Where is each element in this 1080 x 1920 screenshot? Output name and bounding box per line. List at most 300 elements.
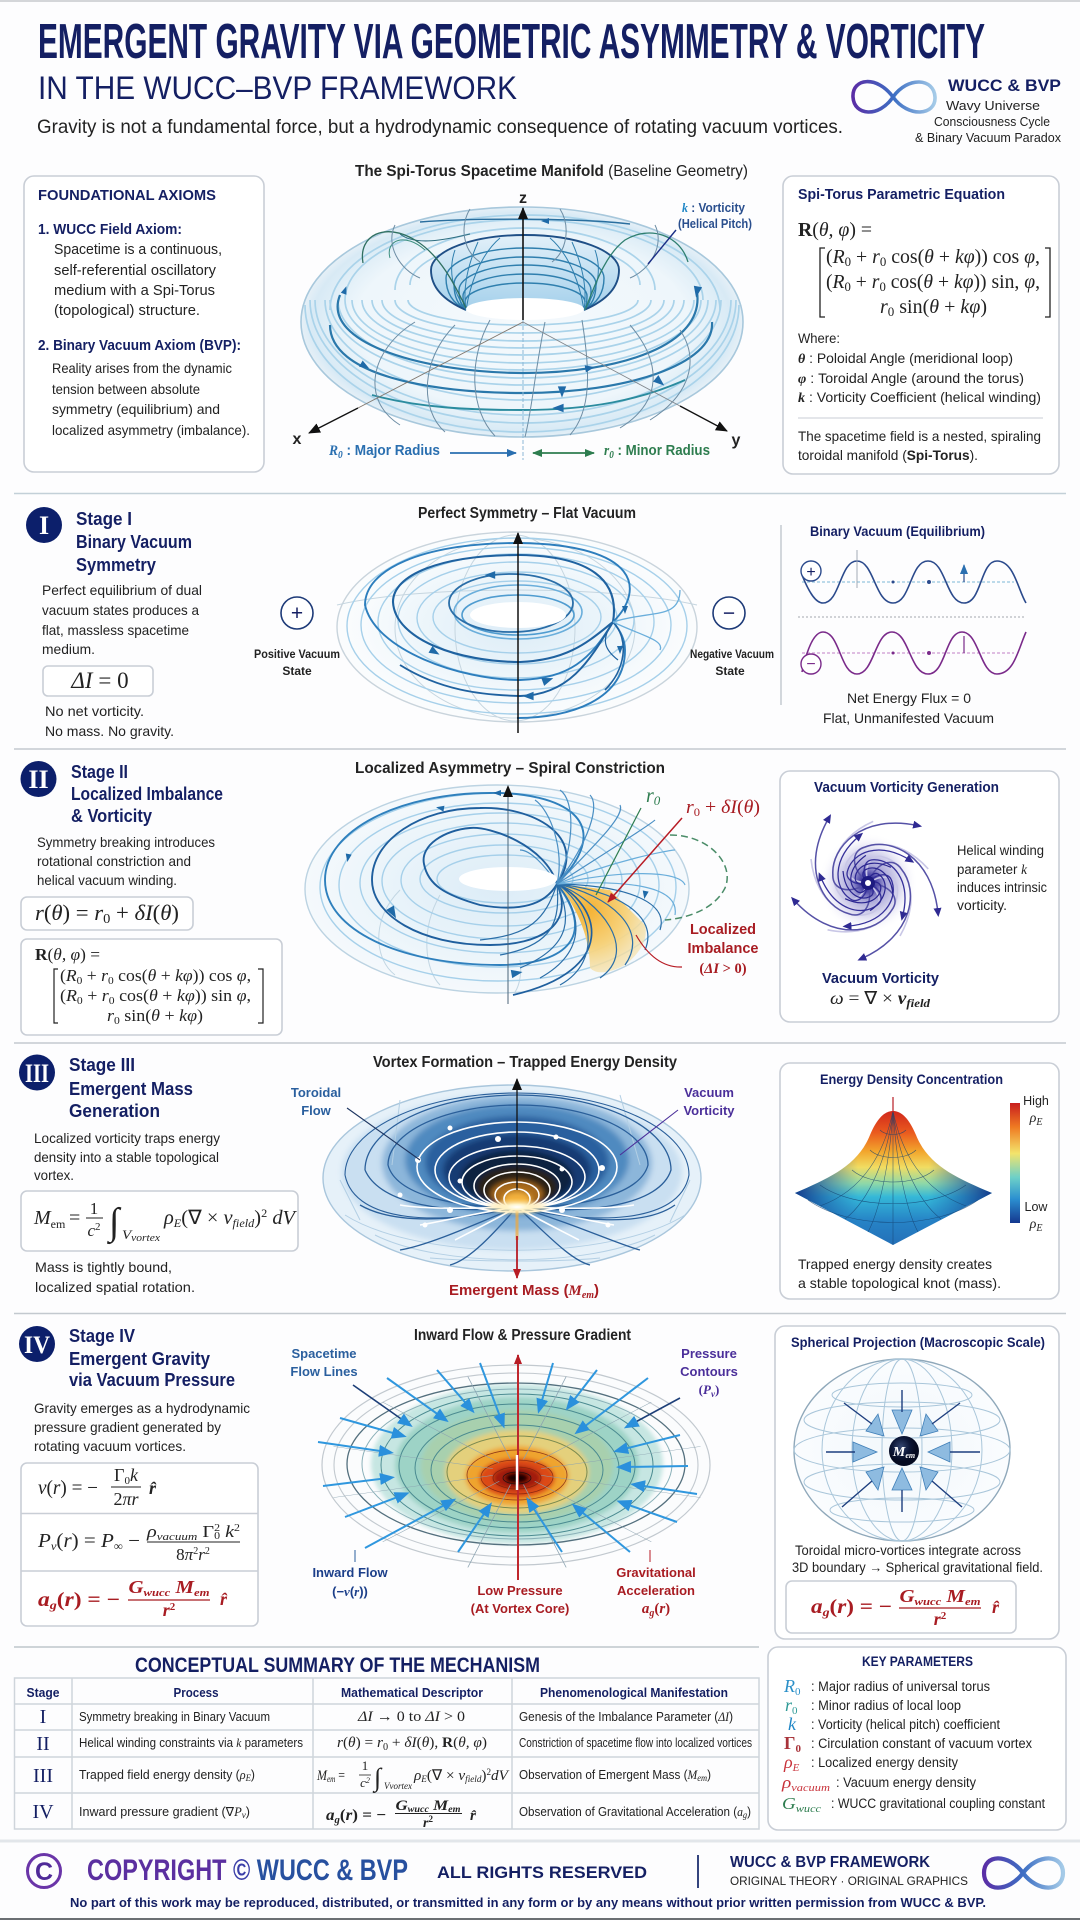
rights reserved: ALL RIGHTS RESERVED [437, 1863, 647, 1882]
minor radius label: 0 [609, 450, 614, 461]
equation box: emergent mass: ρ [163, 1207, 174, 1229]
pressure formula: ∞ [114, 1539, 123, 1553]
stage I heading: Symmetry [76, 555, 156, 575]
equation box: emergent mass: (∇ × [181, 1207, 223, 1229]
equation: cos( [886, 246, 925, 268]
table row IV: M [429, 1798, 449, 1814]
equation box: delta I [43, 666, 153, 696]
stage IV description: Gravity emerges as a hydrodynamic [34, 1400, 250, 1416]
major radius label [328, 443, 516, 461]
equation box: emergent mass: 1 [90, 1199, 98, 1218]
legend: colour scale [1010, 1094, 1049, 1234]
equation box: constriction: r(θ) = r [35, 900, 103, 925]
heading: baseline geometry: The Spi-Torus Spacetime Manifold (Baseline Geometry) [355, 163, 748, 180]
stage III heading [69, 1055, 193, 1121]
logo name: WUCC & BVP [948, 76, 1061, 95]
stage III description [34, 1130, 220, 1183]
major radius label: 0 [338, 450, 343, 461]
section: stage I [26, 505, 1026, 739]
annotation: low pressure [471, 1583, 569, 1616]
table row IV: r̂ [470, 1808, 477, 1824]
equation box: gravitational acceleration: G [900, 1586, 914, 1606]
table row IV: r [423, 1816, 429, 1831]
table row IV: Observation of Gravitational Acceleration (a [519, 1805, 753, 1819]
stage IV description [34, 1400, 250, 1454]
copyright line: COPYRIGHT © WUCC & BVP [87, 1854, 408, 1887]
equation: 0 [888, 304, 894, 319]
table row III: E [245, 1773, 251, 1783]
panel caption: Toroidal micro-vortices integrate across [795, 1543, 1021, 1558]
section: stage III [19, 1054, 1059, 1301]
equation [798, 219, 1050, 319]
parameter list [781, 1676, 1045, 1815]
parameter list: vacuum [791, 1782, 830, 1794]
mass core [889, 1436, 919, 1466]
equation box: gravitational acceleration: r [934, 1609, 942, 1629]
stage I chart title: Perfect Symmetry – Flat Vacuum [418, 505, 636, 522]
pressure formula: ( [56, 1530, 64, 1552]
acceleration formula: wucc [143, 1587, 170, 1599]
acceleration formula: em [194, 1587, 210, 1599]
equation box: parametric: cos( [114, 966, 148, 985]
table row III: ∫ [372, 1763, 383, 1793]
annotation: toroidal flow [291, 1085, 420, 1160]
equation box: gravitational acceleration: r) = − [837, 1596, 886, 1618]
equation: 0 [880, 254, 886, 269]
parameter list: G [782, 1794, 794, 1813]
table row II: II [36, 1733, 50, 1755]
acceleration formula: M [170, 1577, 195, 1597]
parameter list: : Circulation constant of vacuum vortex [811, 1736, 1032, 1751]
stage I description [42, 582, 202, 657]
velocity formula: 2πr [113, 1489, 140, 1509]
equation box: parametric: r [102, 986, 109, 1005]
table row II: r(θ) = r [337, 1735, 383, 1751]
stage I conclusion [45, 703, 174, 739]
annotation: r0: 0 [654, 793, 661, 808]
vorticity label [648, 201, 752, 264]
panel: energy density concentration [780, 1063, 1059, 1299]
parameter list: : Localized energy density [811, 1755, 958, 1770]
parameter list: k [788, 1714, 797, 1734]
annotation: r0 + delta I [608, 797, 760, 902]
table row IV: ) [747, 1805, 751, 1819]
parameter list: wucc [796, 1803, 821, 1815]
table row I [40, 1706, 733, 1728]
parameter list: r [785, 1695, 792, 1715]
section: stage II [20, 760, 1059, 1035]
manifold note [798, 428, 1041, 463]
velocity formula: k [130, 1465, 139, 1485]
equation box: parametric: 0 [77, 995, 83, 1007]
table row III: III [33, 1765, 53, 1787]
table header: Phenomenological Manifestation [540, 1685, 728, 1700]
chart caption: Flat, Unmanifested Vacuum [823, 710, 994, 726]
axis z: z [519, 190, 527, 207]
table row II: 0 [383, 1742, 388, 1753]
table row III: dV [491, 1768, 510, 1784]
equation box: parametric: r [101, 966, 108, 985]
equation: θ + kφ)) sin, φ, [923, 271, 1040, 293]
stage II description: Symmetry breaking introduces [37, 834, 215, 850]
velocity formula [38, 1465, 157, 1509]
vorticity formula: ω = ∇ × v [830, 988, 906, 1008]
axiom 2: 2. Binary Vacuum Axiom (BVP): [38, 337, 241, 354]
stage II heading [71, 762, 223, 826]
stage III description: density into a stable topological [34, 1149, 219, 1165]
stage IV heading: Emergent Gravity [69, 1349, 210, 1369]
major radius label: R [328, 443, 343, 461]
axis y: y [732, 432, 741, 449]
axioms heading: FOUNDATIONAL AXIOMS [38, 187, 216, 204]
equation: cos( [886, 271, 924, 293]
equation box: parametric: 0 [114, 1015, 120, 1027]
vorticity label: (Helical Pitch) [678, 217, 752, 231]
positive vacuum state: State [282, 664, 312, 678]
equation box: emergent mass: em [51, 1217, 66, 1231]
legend: colour scale: ρ [1030, 1217, 1036, 1232]
table row I: Symmetry breaking in Binary Vacuum [79, 1710, 270, 1724]
table row III [33, 1758, 711, 1793]
stage IV heading: via Vacuum Pressure [69, 1370, 235, 1390]
pressure formula: r) = P [63, 1530, 113, 1552]
acceleration formula [38, 1577, 228, 1620]
annotation: gravitational acceleration: r) [659, 1601, 670, 1617]
axiom 2: tension between absolute [52, 381, 200, 397]
chart: vortex funnel [323, 1079, 701, 1278]
annotation: r0 + delta I: 0 [694, 805, 700, 819]
pressure formula: 2 [234, 1523, 240, 1534]
equation: + [851, 246, 872, 268]
equation box: parametric: sin( [120, 1006, 152, 1025]
axiom 1 [38, 221, 222, 319]
table row I: I [40, 1706, 46, 1728]
equation: r [872, 246, 880, 268]
axiom 1: medium with a Spi-Torus [54, 283, 215, 299]
annotation: emergent mass: ) [594, 1282, 599, 1299]
table row II: Constriction of spacetime flow into localized vortices [519, 1736, 752, 1750]
stage IV description: pressure gradient generated by [34, 1419, 221, 1435]
annotation: pressure contours: Contours [680, 1364, 738, 1379]
icon: stage I badge [26, 507, 62, 543]
footer [28, 1854, 1063, 1910]
equation box: gravitational acceleration: ( [830, 1596, 838, 1618]
pressure formula: vacuum [157, 1531, 197, 1543]
stage I heading: Binary Vacuum [76, 532, 192, 552]
variable definitions [798, 330, 1041, 406]
annotation: gravitational acceleration: ( [654, 1601, 659, 1617]
acceleration formula: r) = − [65, 1589, 113, 1611]
table row III: field [465, 1774, 482, 1784]
equation box: gravitational acceleration: 2 [941, 1610, 947, 1622]
key parameters heading: KEY PARAMETERS [862, 1654, 973, 1669]
annotation: gravitational acceleration [616, 1550, 696, 1619]
positive vacuum state: Positive Vacuum [254, 647, 340, 661]
section: stage IV [19, 1326, 1059, 1639]
chart: energy density surface [795, 1097, 992, 1245]
annotation: gravitational acceleration: Acceleration [617, 1583, 695, 1598]
panel heading: Vacuum Vorticity Generation [814, 780, 999, 796]
stage IV heading: Stage IV [69, 1326, 135, 1346]
equation: sin( [894, 296, 930, 318]
annotation: toroidal flow: Toroidal [291, 1085, 341, 1100]
annotation: vacuum vorticity: Vorticity [683, 1103, 735, 1118]
annotation: r0 + delta I: r [686, 797, 694, 818]
equation box: emergent mass: ) [254, 1207, 261, 1229]
parameter list: : WUCC gravitational coupling constant [831, 1796, 1045, 1811]
table row III: em [327, 1774, 336, 1784]
variable definitions: Where: [798, 330, 840, 346]
stage I description: flat, massless spacetime [42, 622, 189, 638]
vorticity formula [822, 970, 940, 1010]
panel: key parameters [768, 1647, 1066, 1830]
equation box: emergent mass: vortex [131, 1233, 161, 1244]
annotation: localized imbalance: (ΔI > 0) [699, 961, 747, 977]
inner funnel [431, 235, 619, 310]
framework name: WUCC & BVP FRAMEWORK [730, 1854, 930, 1871]
tagline: Gravity is not a fundamental force, but a hydrodynamic consequence of rotating vacuum vortices. [37, 116, 843, 138]
annotation: pressure contours: Pressure [681, 1346, 737, 1361]
table row III: Vvortex [384, 1781, 412, 1791]
equation: θ + kφ) [929, 296, 987, 318]
icon: infinity logo small [984, 1858, 1063, 1888]
table row III: 1 [362, 1758, 368, 1773]
equation box: parametric: R(θ, φ) = [35, 945, 100, 964]
vorticity formula: Vacuum Vorticity [822, 970, 940, 987]
axiom 1: (topological) structure. [54, 303, 200, 319]
legend: colour scale: ρ [1030, 1111, 1036, 1126]
table row IV: r) = − [346, 1807, 384, 1824]
stage III heading: Emergent Mass [69, 1079, 193, 1099]
page bottom edge [0, 1918, 1080, 1920]
equation box: emergent mass: ∫ [107, 1201, 122, 1245]
axiom 1: self-referential oscillatory [54, 263, 217, 279]
stage I heading [76, 509, 192, 575]
variable definitions: θ : Poloidal Angle (meridional loop) [798, 350, 1013, 367]
minor radius label: r [604, 443, 614, 461]
acceleration formula: G [128, 1577, 143, 1597]
acceleration formula: a [38, 1589, 50, 1611]
annotation: inward flow: Inward Flow [312, 1565, 388, 1580]
stage I conclusion: No net vorticity. [45, 703, 144, 719]
table row IV: g [743, 1810, 748, 1820]
annotation: emergent mass: em [582, 1290, 594, 1301]
table header: Stage [26, 1685, 60, 1700]
acceleration formula: 2 [170, 1601, 176, 1613]
highlight: localized imbalance region [558, 884, 646, 972]
velocity formula: 0 [124, 1475, 130, 1487]
stage IV chart title: Inward Flow & Pressure Gradient [414, 1327, 631, 1344]
equation: (R [826, 246, 845, 268]
equation box: parametric: θ + kφ)) cos φ, [148, 966, 251, 985]
panel heading: Energy Density Concentration [820, 1071, 1003, 1087]
legend: colour scale: E [1035, 1223, 1042, 1234]
icon: stage IV badge: IV [24, 1332, 50, 1359]
annotation: pressure contours: (P [699, 1382, 711, 1397]
icon: stage II badge: II [28, 765, 49, 794]
pressure formula: 8π [176, 1545, 193, 1564]
table header: Mathematical Descriptor [341, 1685, 483, 1700]
vorticity label: k : Vorticity [682, 201, 745, 215]
axiom 1: Spacetime is a continuous, [54, 242, 222, 258]
equation box: parametric: (R [60, 966, 76, 985]
annotation: low pressure: Low Pressure [477, 1583, 563, 1598]
annotation: low pressure: (At Vortex Core) [471, 1601, 569, 1616]
table row IV: Inward pressure gradient (∇P [79, 1805, 242, 1819]
legend: colour scale: Low [1025, 1200, 1048, 1214]
stage IV heading [69, 1326, 235, 1390]
panel: vacuum vorticity generation [780, 771, 1059, 1022]
stage IV description: rotating vacuum vortices. [34, 1438, 186, 1454]
annotation: pressure contours: ) [715, 1382, 719, 1397]
pressure formula: 0 [214, 1531, 220, 1542]
annotation: localized imbalance: Imbalance [688, 941, 758, 957]
equation box: gravitational acceleration: M [941, 1586, 966, 1606]
chart caption: Net Energy Flux = 0 [847, 690, 971, 706]
equation box: delta I: ΔI = 0 [70, 668, 129, 693]
equation box: emergent mass: field [233, 1216, 255, 1230]
parameter list: : Major radius of universal torus [811, 1679, 990, 1694]
equation box: parametric: 0 [109, 995, 115, 1007]
table row IV: IV [32, 1801, 54, 1823]
table row III: c [360, 1775, 366, 1790]
pressure formula: P [37, 1530, 51, 1552]
pressure formula: k [220, 1522, 235, 1541]
annotation: vacuum vorticity: Vacuum [684, 1085, 734, 1100]
chart: binary vacuum waves [798, 523, 1026, 726]
equation box: parametric: 0 [108, 975, 114, 987]
equation box: emergent mass [21, 1191, 298, 1251]
negative vacuum state: − [723, 602, 735, 625]
stage II description: helical vacuum winding. [37, 872, 177, 888]
icon: negative wave [801, 654, 821, 674]
equation box: parametric [21, 939, 282, 1035]
table row III: v [458, 1768, 465, 1784]
stage III conclusion: localized spatial rotation. [35, 1279, 195, 1295]
icon: negative wave: − [806, 656, 816, 673]
parameter list: 0 [792, 1705, 798, 1717]
stage I description: Perfect equilibrium of dual [42, 582, 202, 598]
equation box: emergent mass: M [34, 1207, 51, 1229]
annotation: pressure contours [680, 1346, 738, 1399]
equation: (R [826, 271, 845, 293]
chart: spiral constriction torus [305, 785, 727, 1004]
equation box: parametric: + [82, 966, 101, 985]
annotation: r0 [596, 785, 661, 895]
equation box: constriction: δI(θ) [135, 900, 179, 925]
subtitle: IN THE WUCC–BVP FRAMEWORK [38, 70, 517, 106]
equation: R(θ, φ) = [798, 219, 872, 241]
acceleration formula: ( [57, 1589, 65, 1611]
annotation: toroidal flow: Flow [301, 1103, 332, 1118]
table row IV: wucc [408, 1804, 429, 1814]
axiom 2: Reality arises from the dynamic [52, 360, 232, 376]
table row IV [32, 1798, 751, 1831]
equation box: emergent mass: 2 [261, 1206, 267, 1220]
chart: pressure gradient disk [318, 1355, 710, 1580]
table row III: ) [707, 1768, 711, 1782]
table row IV: G [396, 1798, 408, 1814]
parameter list: ρ [784, 1752, 793, 1772]
annotation: spacetime flow lines [290, 1346, 358, 1379]
variable definitions: φ : Toroidal Angle (around the torus) [798, 370, 1024, 387]
spiral note: vorticity. [957, 898, 1007, 913]
axis x [293, 322, 523, 448]
table row II: δI(θ), R(θ, φ) [404, 1735, 487, 1751]
table row III: ) [251, 1768, 255, 1782]
icon: stage I badge: I [39, 511, 49, 540]
stage III conclusion [35, 1259, 195, 1295]
equation box: constriction [21, 897, 193, 930]
logo: WUCC & BVP [853, 76, 1062, 145]
negative vacuum state [690, 597, 774, 678]
stage III description: Localized vorticity traps energy [34, 1130, 220, 1146]
velocity formula: v(r) = − [38, 1477, 98, 1499]
annotation: spacetime flow lines: Spacetime [291, 1346, 357, 1361]
pressure formula: r [198, 1545, 205, 1564]
equation box: parametric: 0 [77, 975, 83, 987]
table row III: ρ [413, 1768, 421, 1784]
spiral note: induces intrinsic [957, 880, 1047, 895]
parameter list: ρ [782, 1773, 790, 1792]
pressure formula: − [123, 1530, 140, 1552]
table row IV: em [448, 1804, 460, 1814]
pressure formula: 2 [205, 1546, 210, 1557]
logo descriptor: Consciousness Cycle [934, 115, 1050, 129]
stage II description [37, 834, 215, 888]
table row III: = [335, 1768, 345, 1784]
negative vacuum state: State [715, 664, 745, 678]
panel: foundational axioms [24, 176, 264, 472]
table row IV: 2 [428, 1814, 433, 1824]
equation: + [851, 271, 872, 293]
equation box: parametric: + [83, 986, 102, 1005]
panel caption: Trapped energy density creates [798, 1256, 992, 1272]
axis y [523, 322, 741, 449]
parameter list: 0 [795, 1743, 801, 1755]
table row III: ) [481, 1768, 486, 1784]
negative vacuum state: Negative Vacuum [690, 647, 774, 661]
meridian loops [375, 209, 690, 437]
equation box: gravitational acceleration: g [821, 1605, 830, 1619]
table row III: 2 [486, 1767, 491, 1777]
annotation: r0: r [646, 785, 654, 807]
equation box: constriction: 0 [103, 912, 110, 927]
equation: r [872, 271, 880, 293]
parameter list: Γ [784, 1733, 795, 1753]
parameter list: : Vorticity (helical pitch) coefficient [811, 1717, 1000, 1732]
velocity formula: Γ [114, 1465, 124, 1485]
framework name [730, 1854, 968, 1888]
manifold note: toroidal manifold (Spi-Torus). [798, 447, 978, 463]
annotation: emergent mass: Emergent Mass (M [449, 1282, 582, 1299]
panel heading: Spherical Projection (Macroscopic Scale) [791, 1334, 1045, 1350]
annotation: spacetime flow lines: Flow Lines [290, 1364, 358, 1379]
acceleration formula: r̂ [220, 1589, 228, 1609]
table row IV: ) [246, 1805, 250, 1819]
chart: sphere with inward arrows [794, 1359, 1010, 1541]
equation box: parametric: θ + kφ)) sin φ, [149, 986, 251, 1005]
table row II: + [388, 1735, 404, 1751]
axis z [519, 190, 527, 320]
table row IV: a [326, 1807, 335, 1824]
table row IV: v [242, 1810, 246, 1820]
manifold note: The spacetime field is a nested, spiraling [798, 428, 1041, 444]
equation: 0 [845, 254, 851, 269]
table row I: ΔI → 0 to ΔI > 0 [357, 1709, 465, 1725]
icon: infinity logo [853, 82, 935, 112]
annotation: inward flow: (−v(r)) [332, 1584, 368, 1599]
